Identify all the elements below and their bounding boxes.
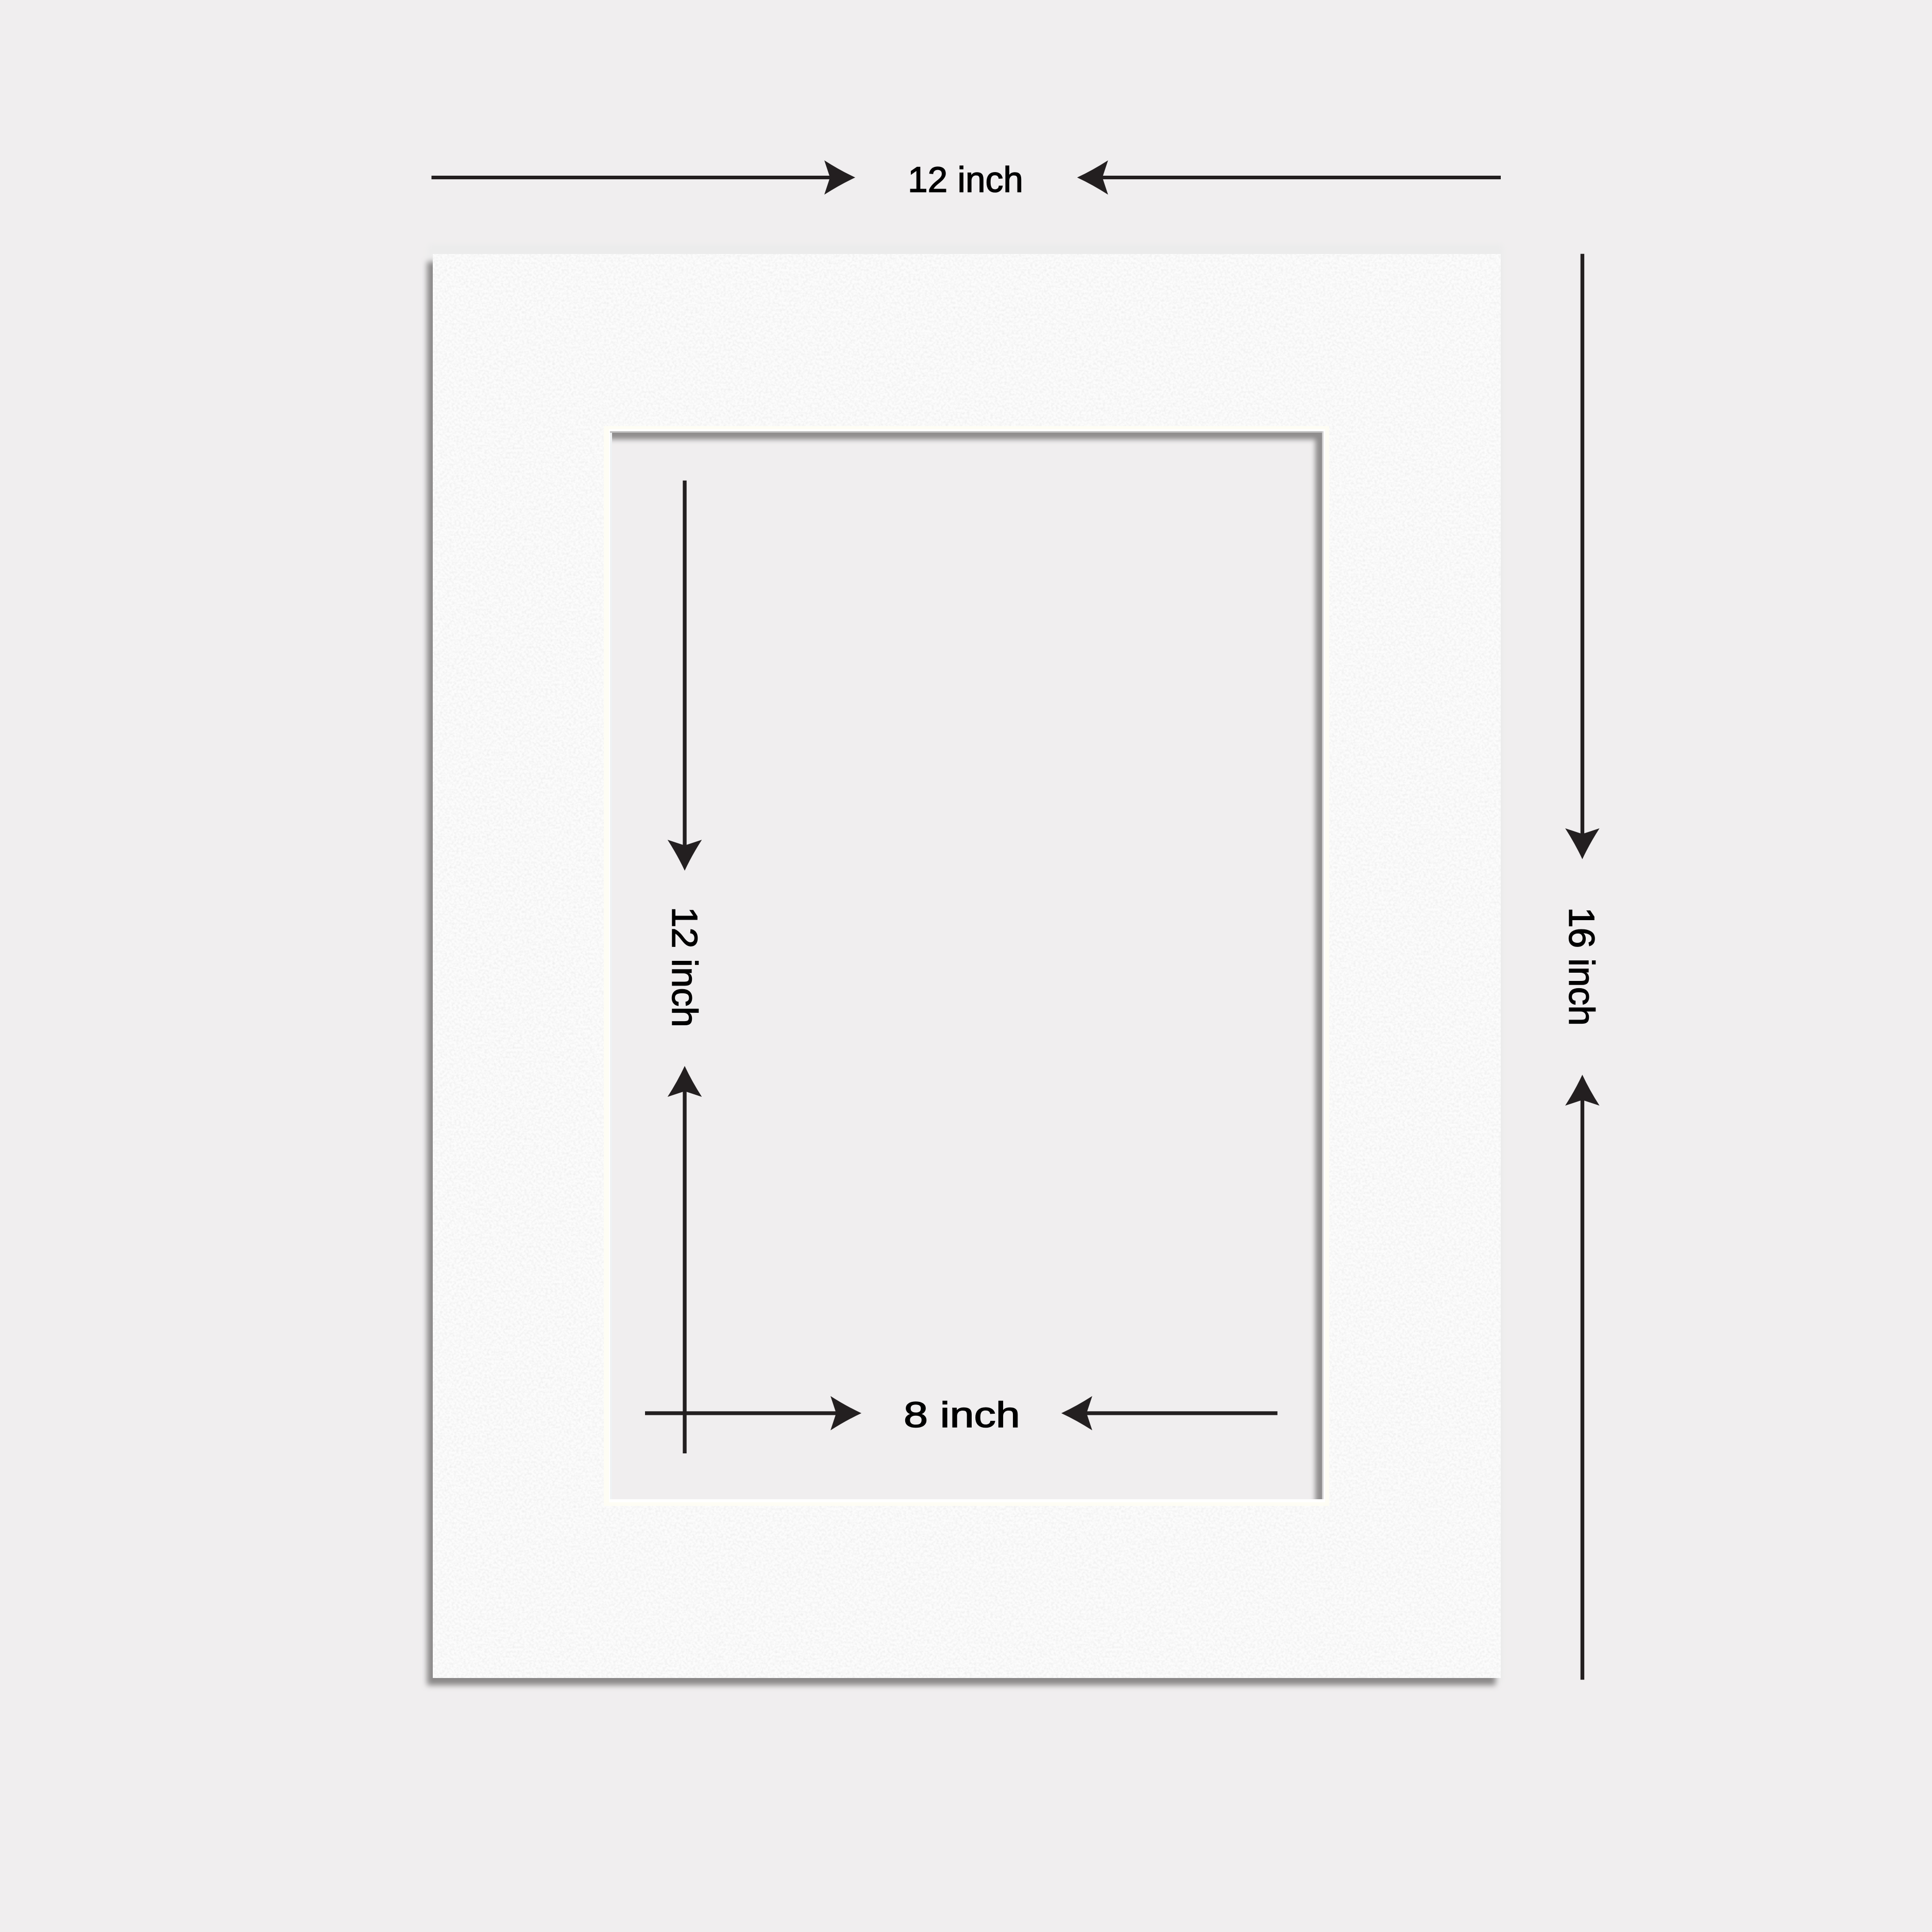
label: window 12 inch: 12 inch [665, 907, 705, 1027]
panel: mat board [427, 244, 1503, 1685]
arrow: top width, left [432, 160, 855, 195]
label: right 16 inch: 16 inch [1562, 907, 1602, 1026]
mat outer shadow [427, 244, 1503, 1685]
arrow: window width, right [1061, 1396, 1278, 1430]
window opening [610, 431, 1324, 1499]
bevel edge of window [604, 426, 1329, 1506]
arrow: right height, top [1565, 254, 1600, 859]
mat board surface [433, 254, 1501, 1678]
arrow: window height, bottom [668, 1066, 702, 1453]
label: top 12 inch: 12 inch [908, 160, 1023, 200]
arrow: top width, right [1077, 160, 1501, 195]
arrow: window width, left [645, 1396, 861, 1430]
arrow: window height, top [668, 481, 702, 871]
label: window 8 inch: 8 inch [904, 1395, 1020, 1435]
arrow: right height, bottom [1565, 1075, 1600, 1680]
